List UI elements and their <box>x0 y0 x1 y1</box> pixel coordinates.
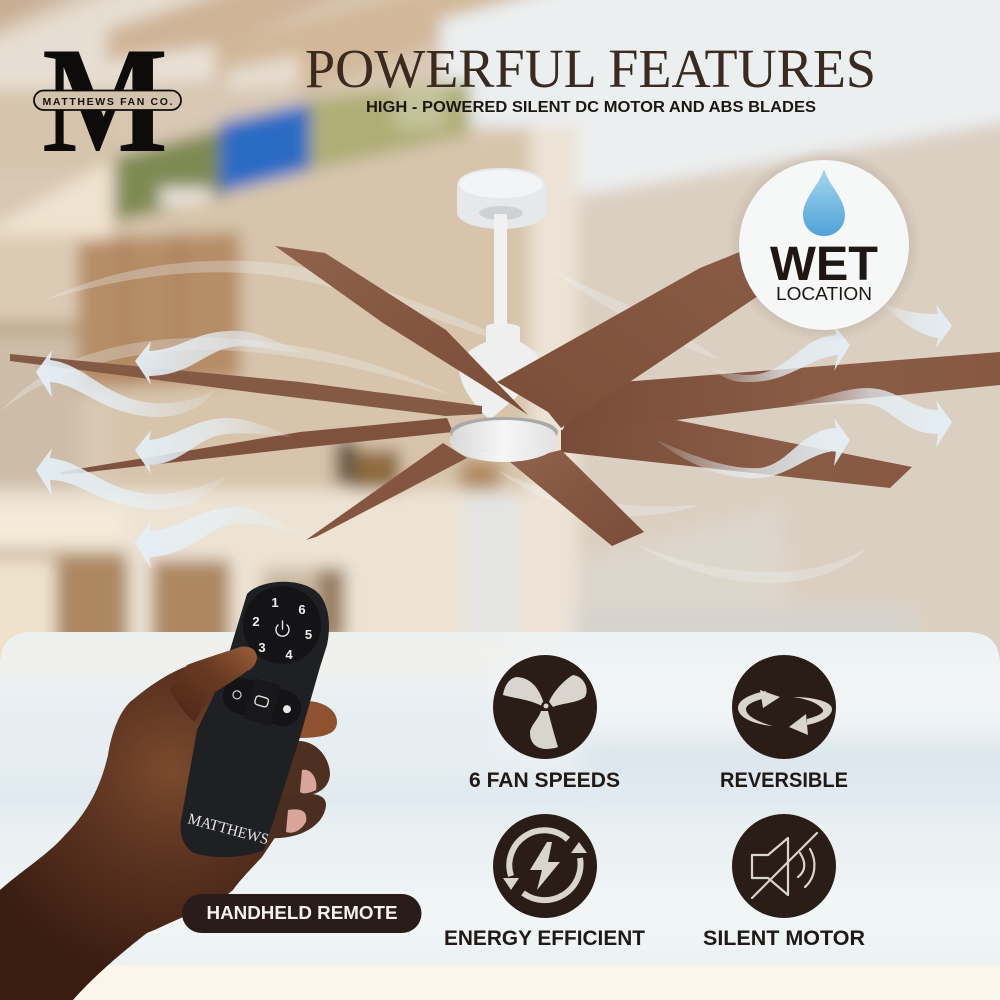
remote function buttons <box>218 671 306 733</box>
subtitle: HIGH - POWERED SILENT DC MOTOR AND ABS BLADES <box>366 99 816 116</box>
thumb <box>170 647 257 722</box>
arrow: left 3 <box>135 418 293 474</box>
feature label: energy efficient: ENERGY EFFICIENT <box>444 927 645 950</box>
fingers <box>268 701 337 838</box>
title: POWERFUL FEATURES <box>305 38 876 99</box>
arrow: left 5 <box>135 507 303 569</box>
remote dial numbers: 1 <box>271 595 279 610</box>
icon: rotating arrows <box>738 690 832 735</box>
remote dial numbers: 5 <box>305 627 312 642</box>
feature label: reversible: REVERSIBLE <box>720 769 848 792</box>
fan canopy <box>457 168 546 229</box>
icon: water drop <box>803 169 845 236</box>
arrow: left 1 <box>135 331 306 385</box>
feature: reversible <box>732 655 836 759</box>
hand holding remote <box>0 582 337 1000</box>
remote dial numbers: 2 <box>252 614 260 629</box>
remote dial numbers: 3 <box>258 640 266 655</box>
feature: silent motor <box>732 814 836 918</box>
wet label: WET <box>770 238 878 291</box>
badge: wet location <box>727 148 921 342</box>
arrow: left 4 <box>36 448 228 509</box>
remote dial numbers: 6 <box>298 602 306 617</box>
feature label: 6 fan speeds: 6 FAN SPEEDS <box>469 769 620 792</box>
fan downrod and motor housing <box>459 214 545 420</box>
remote body <box>181 582 329 857</box>
arrow: right 3 <box>790 388 952 448</box>
fan blade: bottom left <box>306 443 467 540</box>
airflow arrows <box>36 302 952 569</box>
fan blade: left upper thin <box>10 354 482 416</box>
logo: Matthews Fan Co. monogram: M <box>42 16 168 184</box>
remote dial <box>243 586 321 664</box>
logo: Matthews Fan Co. monogram: MATTHEWS FAN CO. <box>42 96 173 108</box>
fan blade: lower right <box>561 420 912 488</box>
panel: translucent features card <box>0 630 1000 965</box>
fan blade: right long <box>561 352 1000 434</box>
icon: fan <box>503 675 587 749</box>
remote dial numbers: 4 <box>285 647 293 662</box>
remote dial numbers <box>252 595 312 662</box>
fan motor cap <box>450 417 558 462</box>
bottom cream strip <box>0 960 1000 1000</box>
arrow: left 2 <box>36 350 216 417</box>
remote power icon <box>276 621 289 636</box>
fan blade: top right wide <box>497 247 758 428</box>
label pill: handheld remote <box>182 894 422 933</box>
hand and arm <box>0 660 300 1000</box>
arrow: right 2 <box>708 325 850 382</box>
fan blade: top left <box>275 246 528 415</box>
location label: LOCATION <box>776 284 872 304</box>
feature: energy efficient <box>493 814 597 918</box>
feature label: silent motor: SILENT MOTOR <box>703 927 865 950</box>
label pill: handheld remote: HANDHELD REMOTE <box>206 902 398 923</box>
icon: lightning cycle <box>503 830 587 900</box>
icon: muted speaker <box>752 833 817 898</box>
fan blade: left lower thin <box>60 418 453 475</box>
arrow: right 1 <box>880 302 952 348</box>
remote brand text: MATTHEWS <box>186 810 271 848</box>
feature: 6 fan speeds <box>493 655 597 759</box>
arrow: right 4 <box>656 418 850 478</box>
faint air swirl arcs <box>0 261 867 583</box>
fan blade: bottom right <box>510 450 644 546</box>
ceiling fan <box>10 168 1000 546</box>
